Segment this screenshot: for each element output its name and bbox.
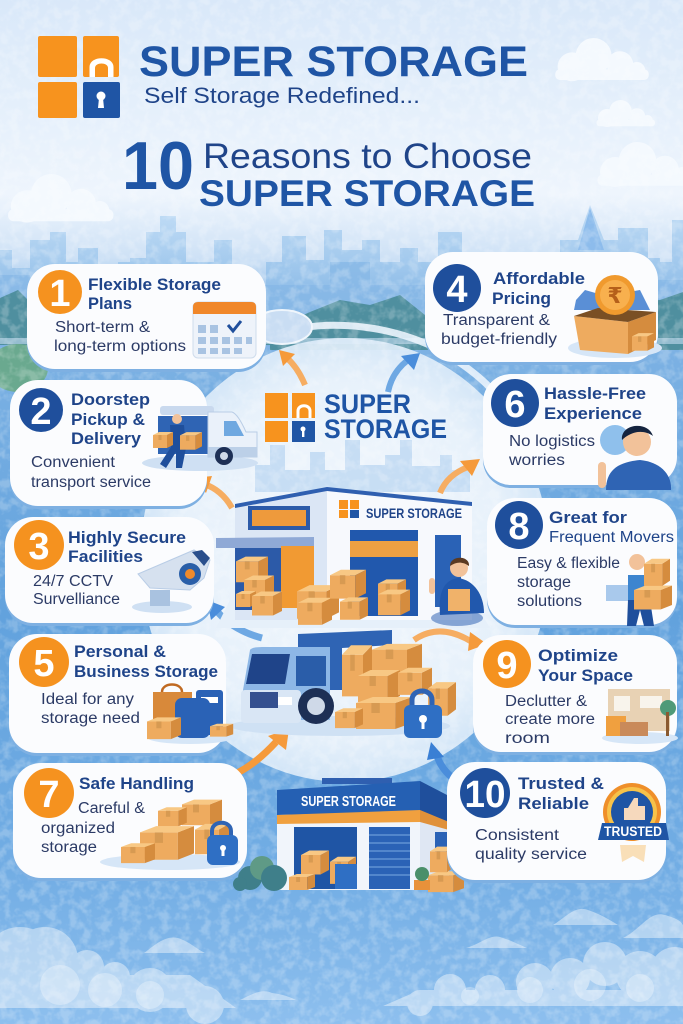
heading: 10 [122, 128, 194, 204]
panel: 5 personal and business storage: Business Storage [74, 662, 218, 681]
panel: 1 flexible storage plans: Flexible Storage [88, 275, 221, 294]
panel: 5 personal and business storage: storage need [41, 710, 140, 727]
panel: 1 flexible storage plans: Plans [88, 294, 132, 313]
logo [38, 36, 120, 118]
icon: bags and boxes [147, 684, 233, 744]
panel: 3 highly secure facilities [5, 517, 214, 626]
sign on building: SUPER STORAGE [366, 505, 462, 521]
panel: 5 personal and business storage [9, 634, 233, 756]
panel: 6 hassle-free experience [483, 374, 677, 490]
bottom clouds [0, 909, 683, 1024]
building: main storage facility [216, 487, 490, 628]
heading: Reasons to Choose [203, 137, 532, 176]
arrow: to card 3 [207, 600, 262, 638]
panel: 8 great for frequent movers: storage [517, 574, 571, 591]
panel: 9 optimize your space: room [505, 730, 550, 747]
panel: 4 affordable pricing: Pricing [492, 289, 551, 308]
panel: 6 hassle-free experience: worries [508, 452, 565, 469]
brand title: SUPER STORAGE [139, 38, 528, 86]
heading: SUPER STORAGE [199, 173, 535, 214]
icon: tidy room [602, 689, 678, 744]
panel: 9 optimize your space [473, 635, 678, 755]
panel: 7 safe handling: 7 [38, 774, 60, 816]
top clouds [8, 38, 683, 223]
icon: trusted badge [598, 783, 669, 862]
panel: 2 doorstep pickup and delivery: Pickup & [71, 410, 145, 429]
building: small storage unit [233, 778, 464, 892]
panel: 9 optimize your space: Your Space [538, 666, 633, 685]
panel: 9 optimize your space: 9 [496, 645, 518, 687]
central glow circle [140, 338, 550, 782]
icon: CCTV camera [132, 550, 210, 613]
panel: 10 trusted and reliable: quality service [475, 846, 587, 863]
arrow: to card 6 [440, 459, 480, 493]
panel: 3 highly secure facilities: 24/7 CCTV [33, 573, 114, 590]
panel: 9 optimize your space: Optimize [538, 646, 618, 665]
panel: 10 trusted and reliable: Reliable [518, 794, 589, 813]
water band [0, 338, 683, 344]
panel: 4 affordable pricing [425, 252, 662, 365]
panel: 10 trusted and reliable: 10 [464, 774, 506, 816]
icon: box with rupee coin: ₹ [607, 284, 623, 309]
panel: 10 trusted and reliable [447, 762, 669, 883]
panel: 9 optimize your space: create more [505, 711, 595, 728]
panel: 3 highly secure facilities: Survelliance [33, 591, 120, 608]
plant [414, 867, 430, 890]
panel: 1 flexible storage plans: Short-term & [55, 319, 151, 336]
panel: 4 affordable pricing: budget-friendly [441, 331, 557, 348]
panel: 7 safe handling [13, 763, 247, 881]
panel: 6 hassle-free experience: Experience [544, 404, 642, 423]
panel: 3 highly secure facilities: Highly Secure [68, 528, 186, 547]
panel: 7 safe handling: Safe Handling [79, 774, 194, 793]
panel: 10 trusted and reliable: Consistent [475, 827, 560, 844]
arrow: to truck from card 10 [427, 742, 458, 782]
panel: 7 safe handling: storage [41, 839, 97, 856]
panel: 8 great for frequent movers: 8 [508, 506, 530, 548]
panel: 8 great for frequent movers: solutions [517, 593, 582, 610]
arrow: to truck from card 7 [230, 729, 289, 776]
panel: 1 flexible storage plans [27, 264, 266, 372]
panel: 9 optimize your space: Declutter & [505, 693, 588, 710]
padlock [404, 691, 442, 738]
panel: 6 hassle-free experience: Hassle-Free [544, 384, 646, 403]
panel: 2 doorstep pickup and delivery: Doorstep [71, 390, 150, 409]
panel: 2 doorstep pickup and delivery: Convenient [31, 454, 116, 471]
sign text: SUPER STORAGE [301, 793, 396, 810]
panel: 2 doorstep pickup and delivery: Delivery [71, 429, 142, 448]
pale mid skyline [255, 440, 470, 492]
translucent bubble by calendar [252, 310, 312, 344]
icon: man pointing [598, 425, 671, 490]
arrow: to card 2 [194, 476, 232, 508]
arrow: to card 4 [388, 353, 420, 392]
panel: 5 personal and business storage: 5 [33, 643, 55, 685]
panel: 4 affordable pricing: 4 [446, 269, 468, 311]
panel: 7 safe handling: organized [41, 820, 115, 837]
panel: 7 safe handling: Careful & [78, 800, 146, 817]
truck with boxes [230, 630, 456, 738]
center logo: SUPER [324, 389, 411, 419]
panel: 4 affordable pricing: Transparent & [443, 312, 551, 329]
panel: 2 doorstep pickup and delivery: 2 [30, 391, 52, 433]
tagline: Self Storage Redefined... [144, 83, 420, 108]
sign on building [339, 500, 462, 521]
center logo: STORAGE [324, 414, 447, 444]
worker at building [429, 558, 484, 626]
panel: 8 great for frequent movers: Frequent Movers [549, 529, 674, 546]
panel: 8 great for frequent movers: Easy & flexible [517, 555, 620, 572]
panel: 8 great for frequent movers [487, 498, 677, 628]
panel: 5 personal and business storage: Personal & [74, 642, 166, 661]
icon: trusted badge: TRUSTED [604, 824, 662, 839]
icon: mover with boxes [606, 554, 672, 626]
icon: boxes and padlock [100, 800, 240, 870]
panel: 10 trusted and reliable: Trusted & [518, 774, 604, 793]
panel: 1 flexible storage plans: 1 [49, 273, 71, 315]
city skyline [0, 205, 683, 310]
panel: 6 hassle-free experience: No logistics [509, 433, 595, 450]
white swoosh connector [300, 325, 500, 400]
center logo [265, 389, 447, 444]
panel: 3 highly secure facilities: 3 [28, 526, 50, 568]
panel: 1 flexible storage plans: long-term options [54, 338, 186, 355]
bush [233, 856, 287, 891]
heading [122, 128, 535, 214]
icon: delivery truck and worker [142, 406, 258, 471]
panel: 4 affordable pricing: Affordable [493, 269, 585, 288]
panel: 6 hassle-free experience: 6 [504, 384, 526, 426]
panel: 3 highly secure facilities: Facilities [68, 547, 143, 566]
panel: 2 doorstep pickup and delivery: transport service [31, 474, 151, 491]
icon: calendar [193, 302, 256, 358]
treeline band [0, 290, 683, 392]
icon: box with rupee coin [568, 275, 662, 358]
panel: 5 personal and business storage: Ideal for any [41, 691, 134, 708]
arrow: to card 9 [414, 631, 487, 651]
panel: 2 doorstep pickup and delivery [10, 380, 258, 509]
arrow: to card 1 [279, 350, 305, 385]
panel: 8 great for frequent movers: Great for [549, 508, 627, 527]
lower cloud highlights [40, 965, 654, 1009]
